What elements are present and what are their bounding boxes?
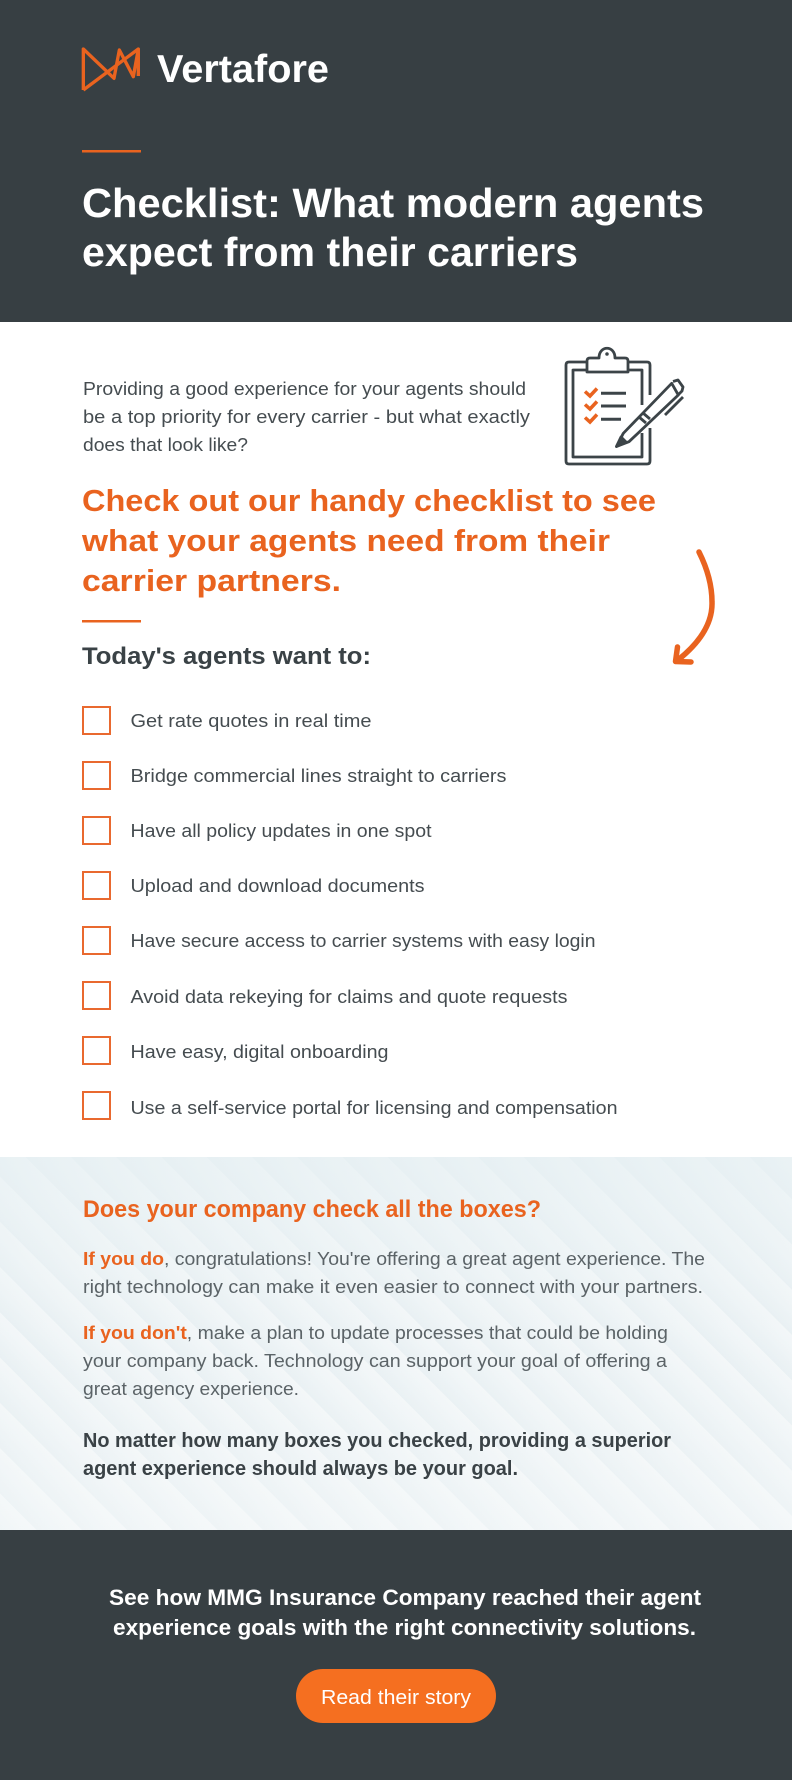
checklist item 7: Have easy, digital onboarding (130, 1041, 388, 1062)
title: expect from their carriers (82, 229, 578, 275)
panel: checklist (83, 707, 618, 1119)
checklist item 8 (83, 1092, 618, 1119)
checklist item 4: Upload and download documents (130, 875, 424, 896)
closing statement: agent experience should always be your goal. (83, 1457, 518, 1480)
paragraph: if you do: If you do , congratulations! You're offering a great agent experience. The (83, 1249, 705, 1269)
section rule (82, 620, 141, 622)
arrow: curved pointing to checklist (676, 552, 712, 662)
checklist heading: Today's agents want to: (82, 643, 371, 670)
closing statement: No matter how many boxes you checked, providing a superior (83, 1429, 671, 1452)
closing statement (83, 1429, 671, 1480)
footer text (109, 1585, 702, 1640)
checklist item 3 (83, 817, 432, 844)
title: Checklist: What modern agents (82, 180, 704, 226)
paragraph: if you don't: your company back. Technology can support your goal of offering a (83, 1351, 668, 1371)
panel: footer call to action (0, 1530, 792, 1780)
checklist item 6: Avoid data rekeying for claims and quote requests (130, 986, 568, 1007)
checklist item 5: Have secure access to carrier systems with easy login (130, 930, 596, 951)
orange call-to-action heading (81, 483, 656, 598)
paragraph: if you don't: great agency experience. (83, 1379, 299, 1399)
button: read their story: Read their story (321, 1687, 471, 1709)
checklist item 2 (83, 762, 507, 789)
paragraph: if you don't (83, 1323, 668, 1399)
panel: does your company check all the boxes (0, 1157, 792, 1530)
orange call-to-action heading: what your agents need from their (81, 523, 610, 558)
title (82, 180, 704, 275)
pen (616, 380, 683, 446)
section heading: Does your company check all the boxes? (83, 1196, 541, 1223)
checklist item 4 (83, 872, 424, 899)
checklist item 8: Use a self-service portal for licensing and compensation (130, 1097, 618, 1118)
checklist item 5 (83, 927, 596, 954)
orange call-to-action heading: carrier partners. (82, 563, 341, 598)
intro text: Providing a good experience for your agents should (83, 378, 526, 399)
icon: Vertafore logo mark (83, 49, 138, 90)
paragraph: if you do: right technology can make it even easier to connect with your partners. (83, 1277, 703, 1297)
header accent rule (82, 150, 141, 152)
checkmarks (585, 388, 597, 422)
checklist item 3: Have all policy updates in one spot (130, 820, 432, 841)
orange call-to-action heading: Check out our handy checklist to see (82, 483, 656, 518)
checklist item 2: Bridge commercial lines straight to carriers (130, 765, 507, 786)
footer text: experience goals with the right connectivity solutions. (113, 1615, 696, 1640)
logo wordmark: Vertafore (157, 48, 329, 91)
icon: clipboard with checklist and pen (566, 348, 683, 464)
panel: header (0, 0, 792, 322)
paragraph: if you do (83, 1249, 705, 1297)
intro text (83, 378, 531, 455)
checklist item 6 (83, 982, 568, 1009)
button: read their story (296, 1669, 496, 1723)
checklist item 1 (83, 707, 372, 734)
intro text: be a top priority for every carrier - but what exactly (83, 406, 531, 427)
paragraph: if you don't: If you don't , make a plan to update processes that could be holding (83, 1323, 668, 1343)
intro text: does that look like? (83, 434, 248, 455)
checklist item 7 (83, 1037, 388, 1064)
checklist item 1: Get rate quotes in real time (130, 710, 372, 731)
footer text: See how MMG Insurance Company reached their agent (109, 1585, 702, 1610)
